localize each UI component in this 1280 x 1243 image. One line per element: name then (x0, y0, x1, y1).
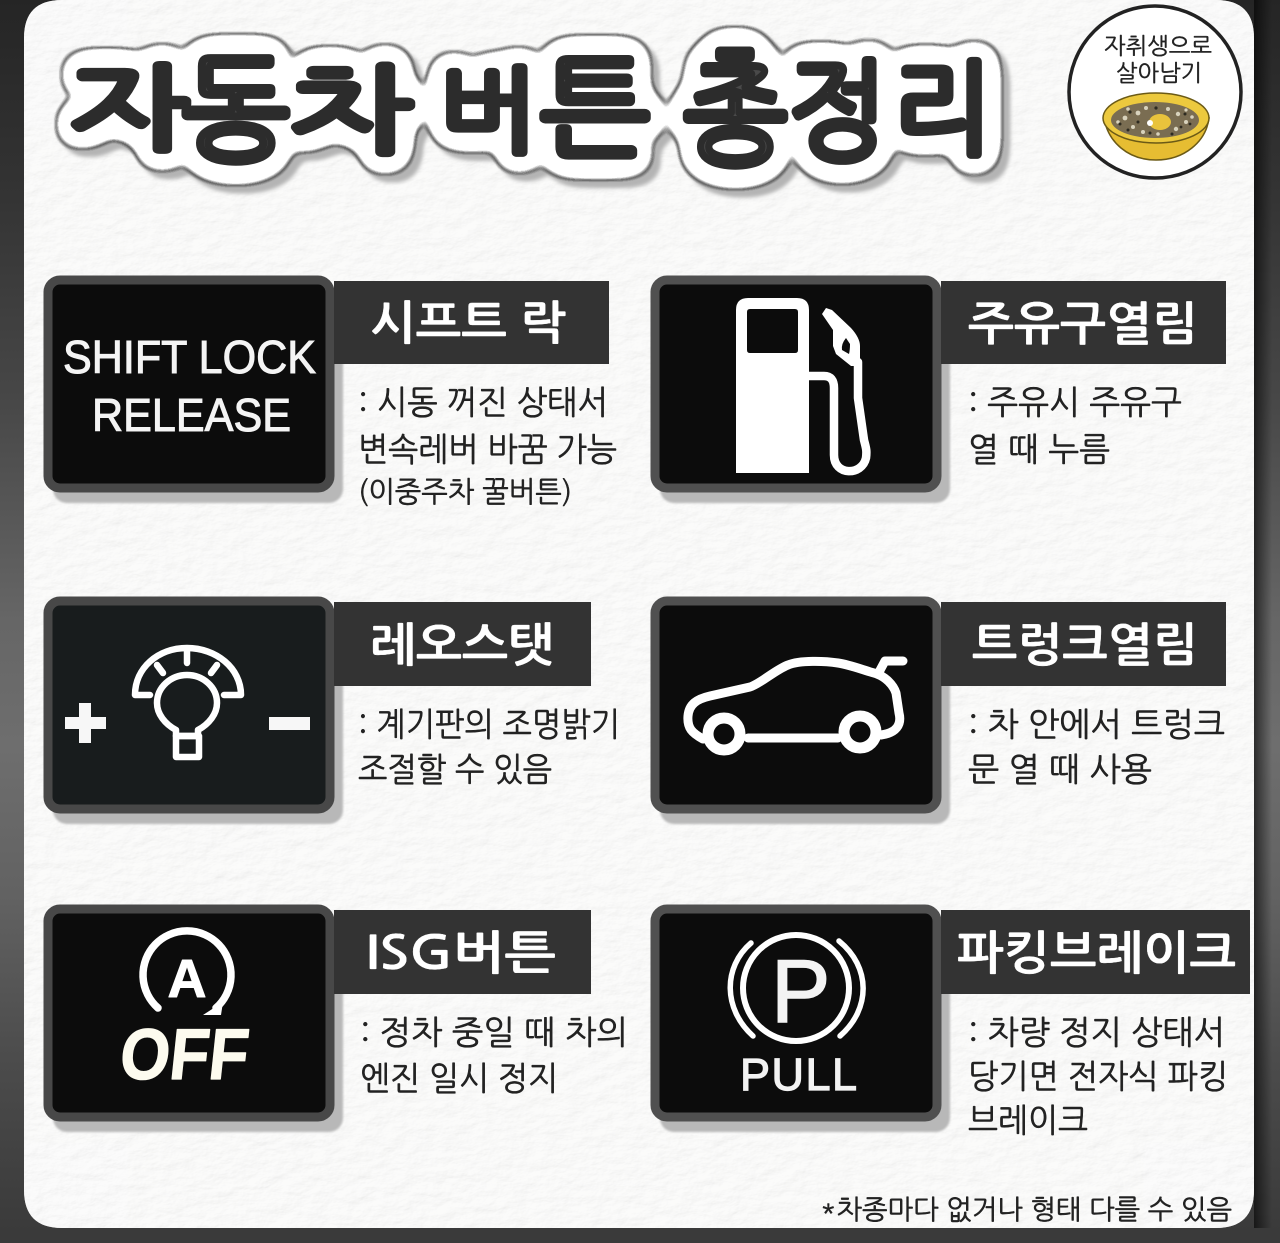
description (968, 1016, 1228, 1137)
title: 동 (182, 53, 290, 167)
badge: 자취생으로 살아남기 (1069, 6, 1241, 178)
heading label: 주유구열림 (968, 301, 1198, 347)
heading label: 트렁크열림 (972, 622, 1198, 668)
description: 문 열 때 사용 (968, 753, 1152, 786)
icon: parking brake (730, 935, 863, 1041)
title (70, 47, 992, 171)
description (968, 708, 1225, 786)
title: 버 (440, 65, 537, 158)
heading label (941, 910, 1250, 994)
description: (이중주차 꿀버튼) (358, 478, 572, 507)
badge: 자취생으로 살아남기: 살아남기 (1116, 60, 1202, 86)
card: fuel door button (655, 280, 950, 503)
description (358, 386, 617, 507)
description: : 주유시 주유구 (968, 386, 1182, 419)
icon: minus (269, 717, 310, 730)
heading label (334, 910, 591, 994)
description: : 시동 꺼진 상태서 (358, 386, 608, 419)
description: 당기면 전자식 파킹 (968, 1060, 1228, 1093)
card: ISG off button (48, 909, 343, 1132)
description (360, 1016, 628, 1095)
description: 조절할 수 있음 (358, 753, 552, 786)
heading label (941, 602, 1226, 686)
panel: ISG버튼 (48, 909, 628, 1132)
description: : 정차 중일 때 차의 (360, 1016, 628, 1049)
description: 브레이크 (968, 1104, 1088, 1137)
description: 열 때 누름 (968, 433, 1110, 466)
icon: parking brake: P (771, 941, 830, 1041)
heading label: 시프트 락 (370, 300, 566, 346)
description: 엔진 일시 정지 (360, 1062, 558, 1095)
title: 차 (289, 63, 412, 158)
panel: 파킹브레이크 (655, 909, 1250, 1137)
description: : 차 안에서 트렁크 (968, 708, 1225, 741)
title: 튼 (540, 53, 650, 163)
OFF text: OFF (116, 1015, 253, 1095)
card: parking brake button (655, 909, 950, 1132)
heading label (941, 281, 1226, 364)
icon: noodle bowl (1103, 93, 1209, 160)
icon: auto stop arrow: A (168, 949, 206, 1009)
heading label: ISG버튼 (366, 930, 556, 976)
icon: car with open trunk (688, 661, 903, 750)
title: 자 (70, 63, 188, 155)
icon: dimmer bulb (135, 648, 241, 757)
title: 총 (683, 47, 788, 171)
PULL text: PULL (740, 1049, 857, 1100)
description (968, 386, 1182, 466)
panel: 주유구열림 (655, 280, 1226, 503)
card: SHIFT LOCK RELEASE button (48, 280, 343, 503)
description: : 차량 정지 상태서 (968, 1016, 1225, 1049)
card: trunk button (655, 601, 950, 824)
heading label (334, 281, 609, 364)
description: : 계기판의 조명밝기 (358, 708, 620, 741)
icon: auto stop arrow (143, 931, 231, 1015)
footnote: *차종마다 없거나 형태 다를 수 있음 (820, 1196, 1232, 1223)
title: 리 (893, 58, 992, 160)
badge: 자취생으로 살아남기: 자취생으로 (1104, 33, 1212, 59)
title: 정 (788, 57, 887, 166)
description: 변속레버 바꿈 가능 (358, 433, 617, 466)
panel: 트렁크열림 (655, 601, 1226, 824)
panel: 시프트 락 (48, 280, 617, 507)
panel: 레오스탯 (48, 601, 620, 824)
card: SHIFT LOCK RELEASE button: RELEASE (92, 389, 291, 441)
heading label (334, 602, 591, 686)
description (358, 708, 620, 786)
icon: plus (65, 703, 106, 743)
icon: fuel pump (736, 298, 866, 473)
card: rheostat button (48, 601, 343, 824)
card: SHIFT LOCK RELEASE button: SHIFT LOCK (63, 331, 316, 383)
heading label: 레오스탯 (370, 622, 554, 668)
heading label: 파킹브레이크 (957, 930, 1236, 976)
